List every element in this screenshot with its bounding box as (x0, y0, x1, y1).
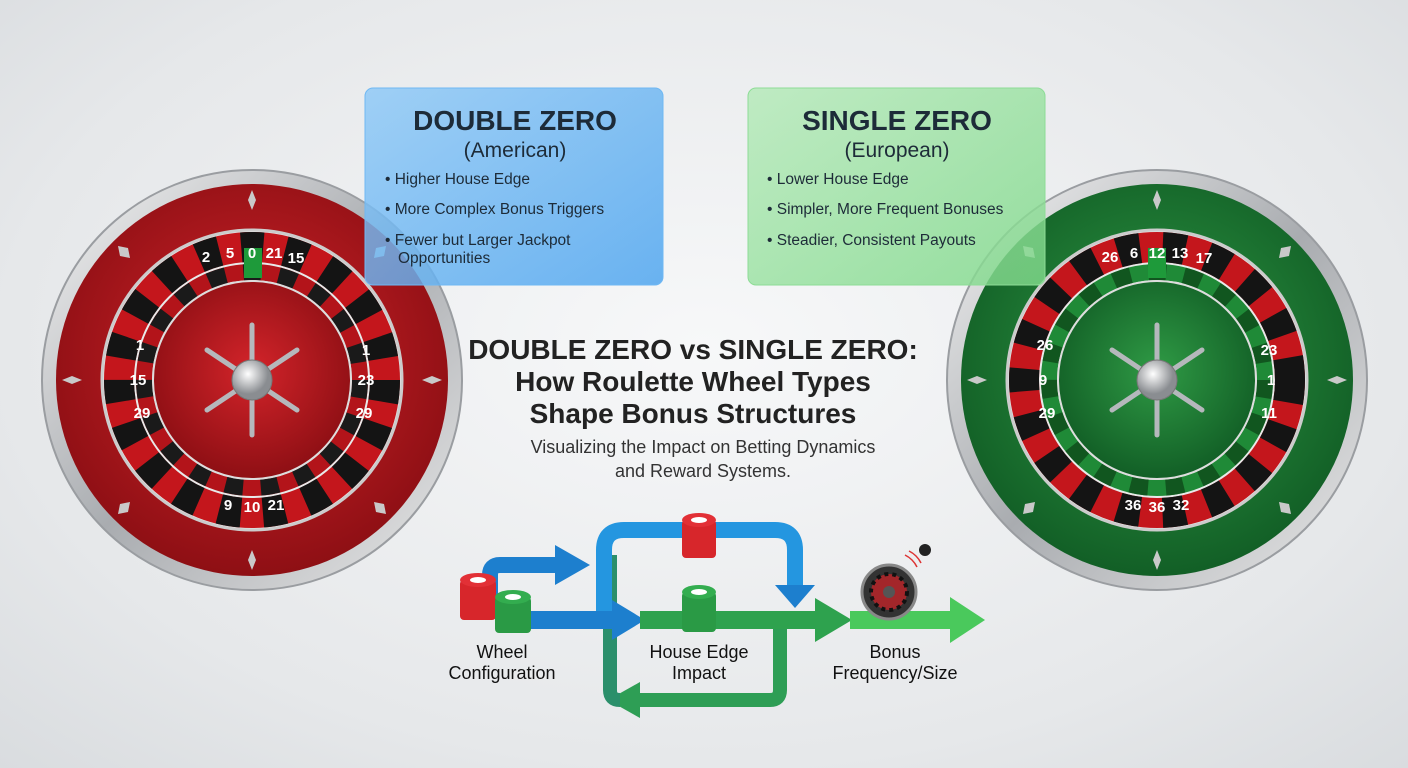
left wheel: double zero: 21 (266, 245, 282, 262)
left wheel: double zero: 5 (226, 245, 234, 262)
panel: double zero: Opportunities (398, 250, 490, 267)
panel: single zero: • Lower House Edge (767, 171, 909, 188)
right wheel: single zero: 36 (1149, 499, 1165, 516)
panel: single zero: • Simpler, More Frequent Bonuses (767, 201, 1004, 218)
right wheel: single zero: 32 (1173, 497, 1189, 514)
left wheel: double zero: 2 (202, 249, 210, 266)
title (468, 334, 918, 429)
subtitle: and Reward Systems. (615, 461, 791, 481)
flow labels: Frequency/Size (832, 663, 958, 683)
panel: double zero: • Fewer but Larger Jackpot (385, 232, 571, 249)
left wheel: double zero: 29 (134, 405, 150, 422)
panel: single zero: (European) (844, 139, 950, 162)
flow labels: House Edge (649, 642, 749, 662)
panel: double zero: • Higher House Edge (385, 171, 530, 188)
flow labels: Wheel (476, 642, 528, 662)
title: DOUBLE ZERO vs SINGLE ZERO: (468, 334, 918, 365)
title: How Roulette Wheel Types (515, 366, 871, 397)
left wheel: double zero: 15 (130, 372, 146, 389)
left wheel: double zero: 1 (136, 337, 144, 354)
panel: double zero: • More Complex Bonus Triggers (385, 201, 604, 218)
right wheel: single zero: 26 (1037, 337, 1053, 354)
flow labels: Bonus (869, 642, 921, 662)
right wheel: single zero: 11 (1261, 405, 1277, 422)
left wheel: double zero: 23 (358, 372, 374, 389)
icon: chips (460, 513, 716, 633)
left wheel: double zero: 1 (362, 342, 370, 359)
subtitle (531, 437, 875, 481)
right wheel: single zero (947, 170, 1367, 590)
right wheel: single zero: 36 (1125, 497, 1141, 514)
panel: single zero (748, 88, 1045, 285)
flow labels: Impact (672, 663, 726, 683)
flow diagram (448, 513, 985, 718)
left wheel: double zero: 0 (248, 245, 256, 262)
left wheel: double zero (42, 170, 462, 590)
right wheel: single zero: 29 (1039, 405, 1055, 422)
panel: single zero: • Steadier, Consistent Payouts (767, 232, 976, 249)
left wheel: double zero: 21 (268, 497, 284, 514)
left wheel: double zero: 9 (224, 497, 232, 514)
subtitle: Visualizing the Impact on Betting Dynamics (531, 437, 875, 457)
right wheel: single zero: 9 (1039, 372, 1047, 389)
panel: single zero: SINGLE ZERO (802, 105, 992, 136)
right wheel: single zero: 6 (1130, 245, 1138, 262)
right wheel: single zero: 23 (1261, 342, 1277, 359)
panel: double zero: DOUBLE ZERO (413, 105, 617, 136)
panel: double zero: (American) (464, 139, 566, 162)
panel: double zero (365, 88, 663, 285)
left wheel: double zero: 15 (288, 250, 304, 267)
right wheel: single zero: 13 (1172, 245, 1188, 262)
flow labels: Configuration (448, 663, 556, 683)
title: Shape Bonus Structures (530, 398, 856, 429)
right wheel: single zero: 26 (1102, 249, 1118, 266)
right wheel: single zero: 12 (1149, 245, 1165, 262)
icon: mini roulette (862, 544, 931, 619)
left wheel: double zero: 29 (356, 405, 372, 422)
right wheel: single zero: 17 (1196, 250, 1212, 267)
left wheel: double zero: 10 (244, 499, 260, 516)
right wheel: single zero: 1 (1267, 372, 1275, 389)
